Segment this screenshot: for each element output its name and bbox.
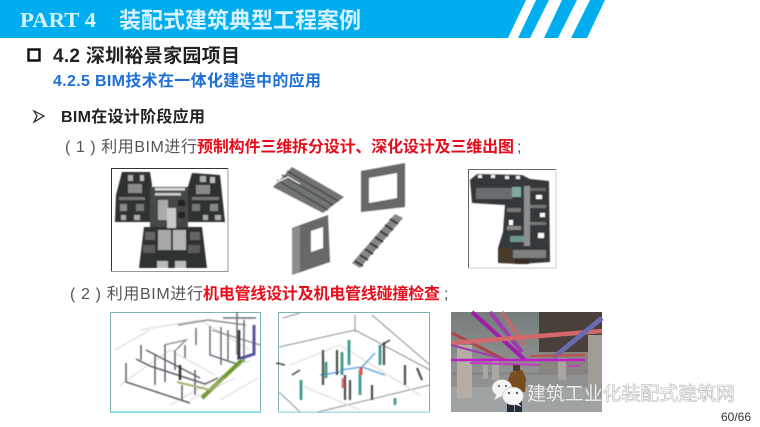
image: MEP pipe layout 1 [110,312,261,412]
icon: wechat logo [492,380,524,407]
image: building model, wings and core [111,168,228,272]
header banner [0,0,605,38]
page number: 60/66 [721,410,751,424]
component: upper wall panel [361,163,405,212]
person figure [507,365,526,412]
item 2 text [70,284,448,303]
item 2 text: 机电管线设计及机电管线碰撞检查 [203,284,440,303]
component: lower wall panel [292,215,330,275]
header title: PART 4 [20,8,97,32]
item 1 text: 预制构件三维拆分设计、深化设计及三维出图 [197,137,514,156]
component: floor slab [273,167,344,213]
image: 3D rendered interior with pipes [451,312,602,412]
image: MEP pipe layout 2 [276,312,430,412]
subsection heading: 4.2.5 BIM技术在一体化建造中的应用 [53,71,321,90]
section heading: 4.2 深圳裕景家园项目 [53,44,240,67]
image: precast components [273,163,405,275]
item 1 text: ; [517,139,521,156]
item 2 text: ( 2 ) 利用BIM进行 [70,285,203,303]
image: L-shaped building model [468,169,556,268]
watermark [492,380,735,407]
watermark text: 建筑工业化装配式建筑网 [527,383,735,405]
header title: 装配式建筑典型工程案例 [119,8,361,33]
design stage bullet: BIM在设计阶段应用 [61,107,205,126]
component: staircase [352,214,403,268]
item 2 text: ; [444,286,448,303]
item 1 text [65,137,521,156]
item 1 text: ( 1 ) 利用BIM进行 [65,138,197,156]
